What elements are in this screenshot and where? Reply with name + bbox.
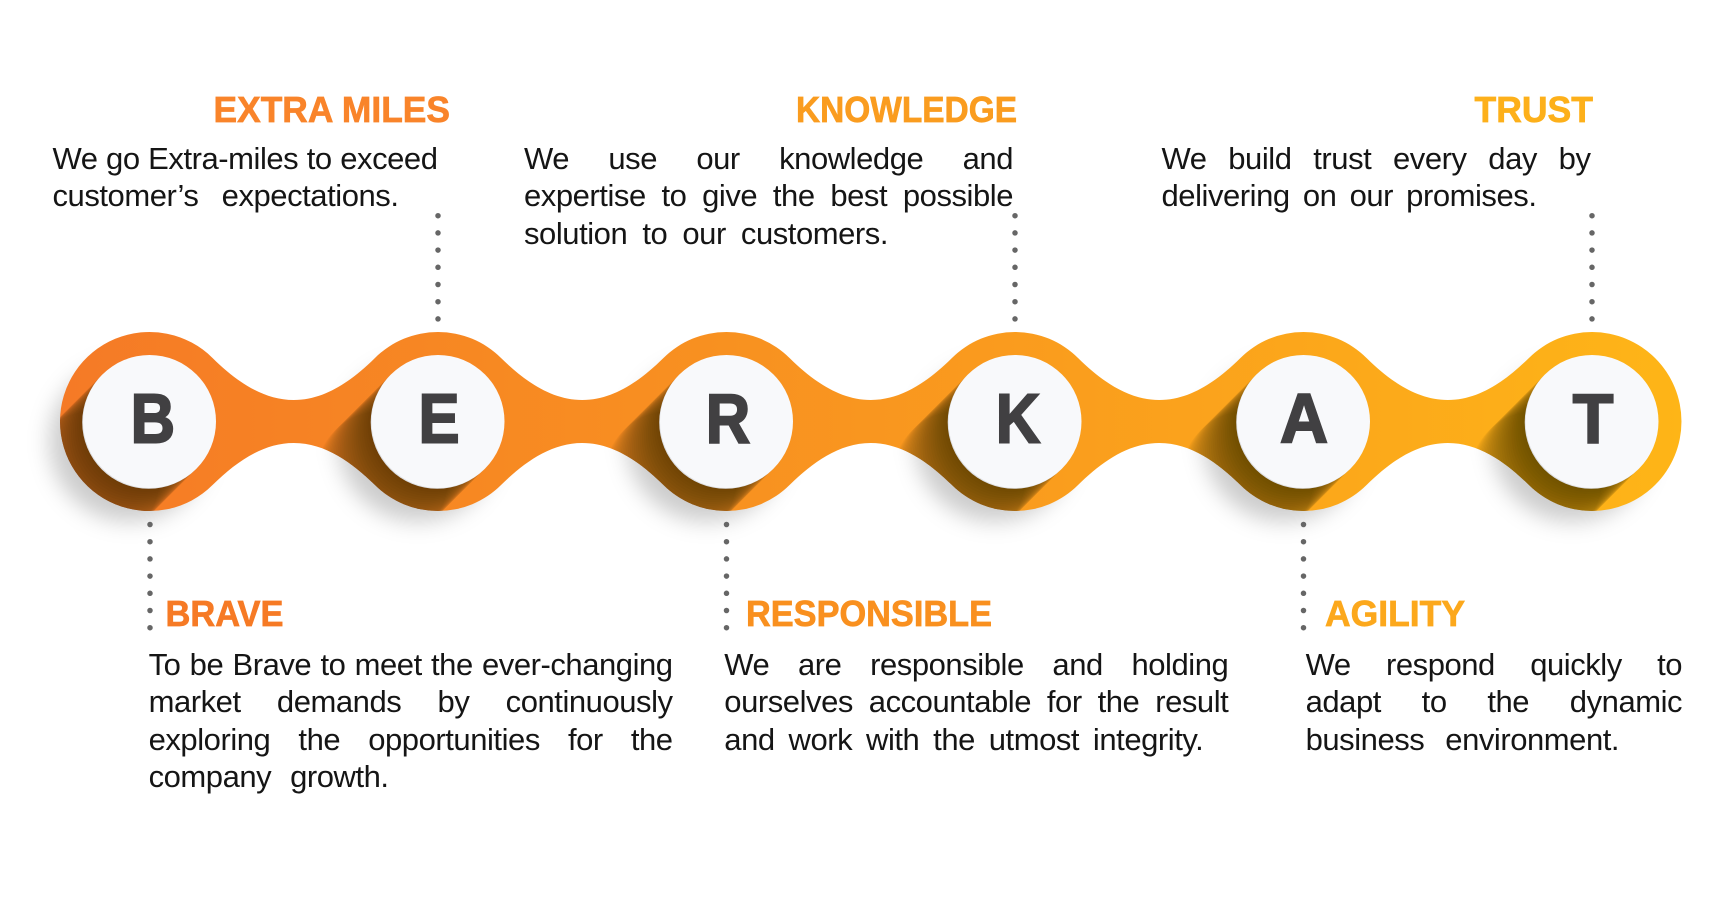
text: brave: company growth. bbox=[149, 759, 389, 794]
text: agility: business environment. bbox=[1306, 722, 1619, 757]
node E bbox=[371, 355, 504, 489]
text: agility bbox=[1306, 647, 1682, 757]
soft ground shadows beneath chain bbox=[50, 362, 1652, 522]
text: trust: delivering on our promises. bbox=[1162, 178, 1536, 213]
text: knowledge: solution to our customers. bbox=[524, 216, 888, 251]
dotted connector: extra miles bbox=[435, 216, 441, 321]
text: knowledge: We use our knowledge and bbox=[524, 141, 1013, 176]
orange gradient chain band bbox=[60, 332, 1681, 511]
heading: trust: TRUST bbox=[1474, 89, 1593, 130]
text: brave: market demands by continuously bbox=[149, 684, 673, 719]
node B: B bbox=[131, 379, 175, 457]
text: extra miles bbox=[52, 141, 438, 213]
heading: knowledge: KNOWLEDGE bbox=[796, 89, 1017, 130]
node B bbox=[82, 355, 216, 489]
text: trust: We build trust every day by bbox=[1162, 141, 1590, 176]
text: responsible: ourselves accountable for the result bbox=[724, 684, 1228, 719]
node E: E bbox=[418, 379, 460, 457]
dotted connector: knowledge bbox=[1012, 216, 1018, 321]
text: agility: adapt to the dynamic bbox=[1306, 684, 1682, 719]
text: knowledge: expertise to give the best possible bbox=[524, 178, 1013, 213]
heading: agility: AGILITY bbox=[1325, 593, 1465, 634]
text: brave: To be Brave to meet the ever-changing bbox=[149, 647, 673, 682]
dotted connector: brave bbox=[147, 524, 153, 630]
node T bbox=[1525, 355, 1658, 489]
node T: T bbox=[1573, 380, 1613, 458]
text: extra miles: customer’s expectations. bbox=[52, 178, 398, 213]
text: responsible: We are responsible and holding bbox=[724, 647, 1228, 682]
node R bbox=[659, 355, 793, 489]
node K: K bbox=[996, 379, 1040, 457]
text: responsible bbox=[724, 647, 1228, 757]
node A: A bbox=[1280, 380, 1328, 458]
node K bbox=[948, 355, 1082, 489]
text: brave: exploring the opportunities for the bbox=[149, 722, 673, 757]
text: brave bbox=[149, 647, 673, 794]
node R: R bbox=[706, 379, 750, 457]
heading: extra miles: EXTRA MILES bbox=[214, 89, 450, 130]
heading: brave: BRAVE bbox=[166, 593, 284, 634]
text: trust bbox=[1162, 141, 1591, 213]
text: knowledge bbox=[524, 141, 1013, 251]
dotted connector: responsible bbox=[724, 524, 729, 630]
long drop shadows on chain bbox=[60, 380, 1633, 511]
text: extra miles: We go Extra-miles to exceed bbox=[52, 141, 438, 176]
infographic graphics bbox=[40, 96, 1682, 630]
dotted connector: trust bbox=[1589, 216, 1595, 321]
text: responsible: and work with the utmost integrity. bbox=[724, 722, 1203, 757]
node A bbox=[1236, 355, 1370, 489]
dotted connector: agility bbox=[1301, 524, 1306, 630]
text: agility: We respond quickly to bbox=[1306, 647, 1682, 682]
heading: responsible: RESPONSIBLE bbox=[746, 593, 992, 634]
